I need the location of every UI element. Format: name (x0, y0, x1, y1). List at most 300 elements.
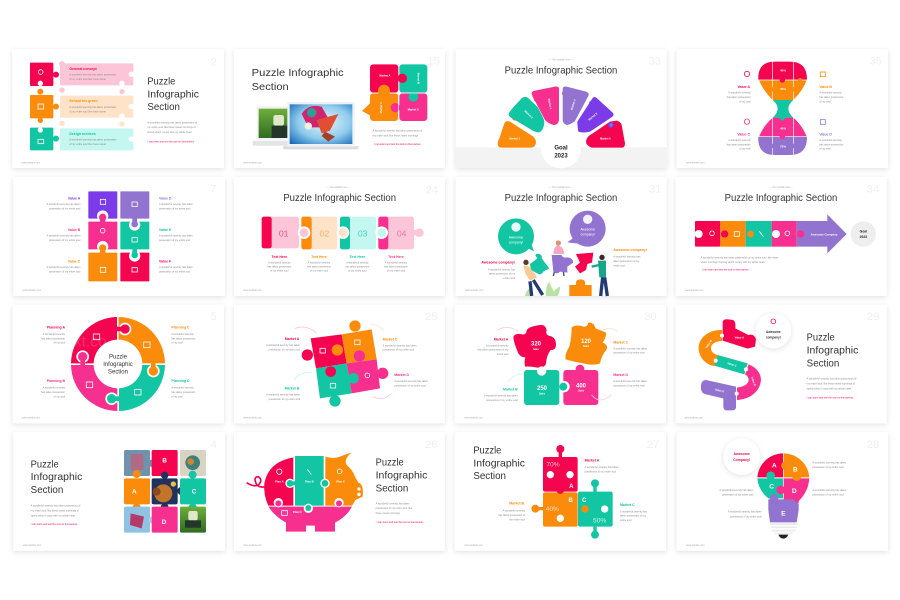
heading: Infographic (376, 470, 427, 481)
body text: my entire soul, like these sweet mornings of (147, 126, 196, 129)
value labels: possession of my entire soul (49, 239, 81, 242)
body text (373, 130, 423, 146)
row: design services: A wonderful serenity has taken possession (69, 139, 117, 142)
market labels: A wonderful serenity has taken (484, 395, 518, 398)
dollar sign puzzle: Value C (727, 361, 737, 368)
puzzle pieces: B (569, 498, 574, 504)
market labels: A wonderful serenity has (620, 510, 648, 513)
market labels (478, 337, 648, 402)
teal speech bubble: Awesome (509, 235, 523, 239)
small laptop image (253, 106, 295, 146)
body text: possession of my entire soul, like (376, 507, 413, 510)
bottom-left quadrant of slides (13, 305, 445, 551)
ring centre heading: Puzzle (109, 355, 128, 361)
market labels: possession of my entire soul (269, 398, 300, 401)
goal circle: Goal (554, 145, 568, 151)
rotated puzzle (302, 320, 388, 407)
callout circle: Awesome (734, 452, 750, 456)
body text (807, 378, 857, 399)
body text: A wonderful serenity has taken possession of (807, 378, 857, 381)
callout circle (723, 438, 760, 475)
right caption: Awesome company! (613, 248, 647, 252)
purple speech bubble (567, 211, 606, 247)
value labels and icons: Value C (737, 132, 750, 136)
body text: I can learn and test the tool on themselves (147, 140, 195, 143)
heading (31, 459, 82, 496)
step captions: Text Here (311, 255, 327, 259)
step 03: 03 (358, 229, 368, 239)
row: design services: of my entire soul like these sweet (69, 143, 106, 146)
callout circle (756, 313, 791, 348)
piggy bank puzzle: Plan D (293, 510, 302, 514)
value labels: Value F (159, 259, 171, 263)
planning labels: has taken possession (41, 337, 66, 340)
slide: rotated four-piece puzzle, number 25: www.website.com (243, 416, 262, 419)
arrow made of puzzle pieces: Awesome Company (811, 232, 838, 236)
slide: dollar sign, number 29: www.website.com (684, 416, 703, 419)
planning labels: A wonderful serenity (171, 333, 194, 336)
body text (701, 256, 779, 271)
heading: Section (376, 483, 409, 494)
slide: circular ring, number 5: 5 (211, 311, 217, 323)
heading (807, 333, 858, 369)
market labels (498, 459, 648, 522)
puzzle: four markets (362, 64, 427, 121)
heading: Puzzle (376, 458, 404, 469)
3 by 3 photo puzzle: C (192, 489, 197, 496)
value labels and icons: of my soul (819, 148, 831, 151)
row: general concept: of my entire soul like these sweet (69, 78, 106, 81)
slide: piggy bank, number 26: 26 (425, 439, 438, 451)
arrow made of puzzle pieces (695, 214, 847, 253)
ring centre heading: Infographic (103, 362, 133, 368)
3 by 3 photo puzzle: D (162, 519, 167, 526)
teal speech bubble (498, 218, 534, 254)
callout circle: Company! (733, 458, 750, 462)
left caption: A wonderful serenity has (488, 268, 516, 271)
market labels: Market D (613, 373, 629, 377)
semicircle of five puzzle segments: Market 1 (509, 136, 521, 140)
value labels: possession of my entire soul (49, 270, 81, 273)
heading: — Your subtitle here — (549, 58, 574, 61)
heading: Infographic (807, 345, 858, 356)
illustration: people holding puzzle pieces (523, 240, 607, 296)
body text (147, 121, 197, 143)
market labels: Market C (613, 340, 629, 344)
heading (283, 186, 396, 204)
market labels: A wonderful serenity has taken (266, 344, 301, 347)
right caption: A wonderful serenity has (613, 256, 641, 259)
left caption: taken possession of my (489, 273, 516, 276)
slide: light bulb, number 28 (677, 432, 888, 551)
slide: four numbered steps, number 24 (234, 177, 445, 296)
market labels: Market B (285, 386, 300, 390)
market labels: Market C (620, 503, 635, 507)
puzzle sales blobs: Sales (583, 346, 590, 348)
bulb labels: A wonderful serenity has taken (728, 511, 762, 514)
slide: puzzle with laptops, number 15 (234, 49, 445, 168)
heading (147, 77, 199, 113)
top-right quadrant of slides (456, 49, 888, 296)
slide: hourglass, number 35 (677, 49, 888, 168)
market labels: possession of my entire soul (383, 349, 414, 352)
market labels: Market D (394, 373, 410, 377)
slide: photo puzzle grid, number 4: 4 (211, 439, 217, 451)
puzzle: four markets: Market A (379, 74, 391, 78)
slide: six value squares, number 7: 7 (210, 184, 216, 196)
light bulb puzzle: D (792, 488, 797, 495)
row: general concept (30, 61, 134, 86)
slide: circular ring, number 5 (13, 305, 224, 423)
market labels: has taken possession of my (478, 349, 509, 352)
market labels: possession of my entire soul (486, 399, 518, 402)
piggy bank puzzle (247, 453, 363, 532)
3 by 3 photo puzzle: A (132, 489, 137, 496)
planning labels: of my soul (54, 342, 65, 345)
step 02 (298, 217, 337, 249)
heading: Section (147, 102, 180, 113)
market labels: Market B (509, 502, 524, 506)
heading (376, 458, 427, 494)
heading: Puzzle (147, 77, 176, 88)
heading: Section (31, 485, 64, 496)
value labels and icons: of my soul (819, 100, 831, 103)
heading: Section (807, 358, 840, 369)
puzzle pieces: 50% (593, 517, 606, 524)
body text: I can learn and test the tool on themselves (702, 268, 749, 271)
light bulb puzzle (757, 453, 809, 539)
planning labels: has taken possession (41, 391, 66, 394)
body text: my entire soul, like these sweet mornings of (807, 383, 855, 386)
step captions: has taken possession (384, 265, 409, 268)
step captions: has taken possession (267, 265, 292, 268)
heading: Puzzle Infographic Section (505, 65, 618, 76)
market labels: Market B (503, 388, 518, 392)
value labels: Value C (68, 259, 81, 263)
heading: Puzzle Infographic (252, 68, 344, 79)
step 04 (375, 217, 424, 249)
market labels: A wonderful serenity (486, 344, 509, 347)
value labels: Value E (159, 228, 172, 232)
step 02: 02 (320, 229, 329, 239)
body text (376, 502, 424, 524)
right caption: entire soul (613, 264, 625, 267)
slide: piggy bank, number 26 (234, 432, 445, 551)
slide: percentage puzzle, number 27: www.website.com (464, 544, 483, 547)
body text: sweet morning of spring which I enjoy with my whole heart. (701, 261, 766, 264)
semicircle of five puzzle segments: Market 3 (547, 98, 553, 110)
planning labels: A wonderful serenity (171, 387, 194, 390)
ring centre heading (103, 355, 133, 376)
slide: percentage puzzle, number 27 (455, 432, 666, 551)
ring of four puzzle pieces: xt.co (74, 334, 106, 351)
top-left quadrant of slides (12, 49, 445, 296)
bulb labels: possession of my entire soul (812, 494, 844, 497)
purple speech bubble: company! (580, 233, 595, 237)
heading: — Your subtitle here — (326, 186, 351, 189)
row: school the green: School the green (69, 99, 98, 103)
right caption (613, 248, 647, 267)
planning labels (41, 325, 196, 398)
bulb labels (719, 461, 847, 518)
value labels: A wonderful serenity has taken (159, 266, 193, 269)
light bulb puzzle: B (793, 467, 798, 474)
left caption (481, 260, 516, 280)
value labels: possession of my entire soul (159, 207, 191, 210)
value labels and icons: A wonderful serenity (819, 92, 842, 95)
puzzle: four markets: Market D (408, 108, 419, 112)
slide: people with puzzle, number 31: 31 (649, 184, 662, 196)
value labels: possession of my entire soul (159, 270, 191, 273)
puzzle sales blobs: 120 (581, 339, 592, 345)
step captions: Text Here (350, 255, 365, 259)
3 by 3 photo puzzle (124, 450, 206, 533)
step captions: A wonderful serenity (308, 261, 331, 264)
slide: people with puzzle, number 31: www.website.com (465, 289, 484, 292)
step captions: A wonderful serenity (268, 261, 291, 264)
bulb labels: possession of my entire soul (812, 466, 844, 469)
pig tail (247, 477, 266, 487)
step 03 (337, 217, 376, 249)
heading: Section (473, 471, 506, 482)
market labels: Market A (285, 337, 300, 341)
puzzle pieces: 40% (546, 506, 559, 513)
puzzle sales blobs: 250 (537, 386, 548, 392)
market labels: A wonderful serenity has taken (394, 380, 429, 383)
slide: hourglass, number 35: www.website.com (686, 161, 705, 164)
heading (473, 446, 525, 482)
heading: Infographic (473, 458, 525, 469)
heading: Section (252, 82, 289, 93)
bulb labels: A wonderful serenity has taken (812, 489, 847, 492)
body text: spring which I enjoy with my whole heart. (807, 387, 852, 390)
planning labels: has taken possession (171, 391, 196, 394)
market labels: A wonderful serenity has taken (383, 344, 417, 347)
slide: piggy bank, number 26: www.website.com (243, 544, 262, 547)
slide: photo puzzle grid, number 4 (13, 432, 225, 551)
row: general concept: A wonderful serenity has taken possession (69, 74, 117, 77)
value labels: A wonderful serenity has taken (46, 235, 81, 238)
curved arrows (294, 324, 391, 399)
body text: I can learn and test the tool on themselves (807, 396, 854, 399)
callout circle: company! (766, 336, 781, 340)
bulb labels: possession of my entire soul (730, 515, 762, 518)
slide: circular ring, number 5: www.website.com (22, 416, 40, 419)
market labels: possession of my entire soul (394, 384, 426, 387)
value labels: Value D (159, 196, 172, 200)
slide: six value squares, number 7: www.website.com (23, 289, 41, 292)
curved arrows (497, 327, 618, 400)
bulb labels: A wonderful serenity has taken (812, 461, 847, 464)
market labels: A wonderful serenity has taken (266, 394, 301, 397)
left caption: Awesome company! (481, 260, 515, 264)
heading: Puzzle Infographic Section (725, 193, 838, 204)
puzzle pieces (531, 445, 613, 539)
slide: puzzle rows, number 2: 2 (211, 56, 217, 68)
hourglass puzzle (758, 62, 807, 155)
slide: rotated four-piece puzzle, number 25: 25 (425, 311, 438, 323)
light bulb puzzle: E (781, 510, 786, 517)
heading: Infographic (31, 472, 82, 483)
market labels: has taken possession of (498, 514, 525, 517)
market labels: A wonderful serenity has taken (613, 347, 648, 350)
value labels: possession of my entire soul (159, 239, 191, 242)
planning labels: of my soul (171, 395, 183, 398)
goal circle: Goal (860, 230, 867, 234)
body text: these sweet mornings (376, 512, 401, 515)
value labels and icons: Value A (738, 85, 750, 89)
heading: Puzzle (807, 333, 835, 344)
puzzle sales blobs: Sales (578, 391, 585, 393)
value labels and icons: A wonderful serenity (819, 139, 842, 142)
bottom-right quadrant of slides (455, 305, 888, 551)
large laptop image (283, 102, 358, 149)
hourglass puzzle: 45% (780, 87, 786, 91)
right caption: taken possession of my (613, 260, 640, 263)
hourglass puzzle: 40% (780, 126, 786, 130)
heading (505, 58, 618, 76)
step captions: Text Here (388, 255, 404, 259)
planning labels: A wonderful serenity (43, 333, 66, 336)
value labels: A wonderful serenity has taken (159, 235, 193, 238)
slide: semicircle goal, number 33 (456, 49, 667, 168)
step captions: has taken possession (345, 265, 370, 268)
value labels: A wonderful serenity has taken (46, 266, 81, 269)
slide: puzzle rows, number 2: www.website.com (22, 161, 40, 164)
value labels and icons: has taken possession (819, 143, 844, 146)
body text: A wonderful serenity has taken (376, 502, 410, 505)
body text: spring which I enjoy with my whole heart. (147, 131, 193, 134)
value labels and icons: A wonderful serenity (728, 139, 751, 142)
slide: photo puzzle grid, number 4: www.website.com (23, 544, 41, 547)
heading: Infographic (147, 89, 199, 100)
step captions: A wonderful serenity (385, 261, 408, 264)
hourglass puzzle: 45% (780, 68, 786, 72)
step captions (267, 255, 409, 273)
value labels and icons: Value B (819, 85, 832, 89)
slide: light bulb, number 28: 28 (867, 439, 879, 451)
heading (725, 186, 838, 204)
slide: percentage puzzle, number 27: 27 (647, 439, 659, 451)
planning labels: Planning B (47, 379, 65, 383)
slide: light bulb, number 28: www.website.com (686, 544, 705, 547)
planning labels: Planning A (47, 325, 65, 329)
slide: four numbered steps, number 24: 24 (426, 184, 438, 196)
3 by 3 photo puzzle: B (162, 458, 167, 465)
slide: hourglass, number 35: 35 (869, 56, 882, 68)
heading: — Your subtitle here — (769, 186, 794, 189)
slide: puzzle arrow, number 34 (676, 177, 887, 296)
body text: A wonderful serenity has taken possession of my entire soul, like these (701, 256, 779, 259)
row: general concept: General concept (69, 67, 97, 71)
slide: four sales blobs, number 30 (455, 305, 666, 423)
semicircle of five puzzle segments: Market 2 (523, 109, 534, 120)
planning labels: A wonderful serenity (43, 387, 66, 390)
light bulb puzzle: C (769, 484, 774, 491)
heading: Puzzle Infographic Section (505, 193, 618, 204)
row: school the green: of my entire soul like these sweet (69, 110, 106, 113)
value labels: Value B (68, 228, 81, 232)
semicircle of five puzzle segments: Market 4 (569, 98, 577, 110)
market labels: entire soul (620, 519, 632, 522)
puzzle sales blobs: Sales (533, 349, 540, 351)
slide: puzzle arrow, number 34: 34 (867, 184, 879, 196)
slide: four sales blobs, number 30: 30 (644, 311, 657, 323)
piggy bank puzzle: Plan A (275, 479, 284, 483)
slide: semicircle goal, number 33: 33 (648, 56, 661, 68)
value labels: A wonderful serenity has taken (159, 203, 193, 206)
slide: puzzle with laptops, number 15: 15 (427, 56, 440, 68)
planning labels: Planning D (171, 379, 190, 383)
left caption: entire soul (504, 277, 515, 280)
light bulb puzzle: A (772, 463, 777, 470)
value labels and icons: of my soul (739, 148, 751, 151)
heading: — Your subtitle here — (549, 186, 574, 189)
value labels and icons: of my soul (739, 100, 751, 103)
slide: six value squares, number 7 (13, 177, 225, 296)
value labels and icons: A wonderful serenity (728, 92, 751, 95)
heading (252, 68, 344, 93)
dollar sign puzzle: Value A (735, 336, 744, 340)
semicircle of five puzzle segments (498, 87, 625, 148)
step captions: Text Here (272, 255, 287, 259)
value labels and icons: has taken possession (819, 96, 844, 99)
market labels (266, 337, 429, 401)
slide: puzzle arrow, number 34: www.website.com (685, 289, 704, 292)
row: design services (30, 121, 134, 150)
body text (31, 505, 81, 526)
step 01: 01 (279, 229, 289, 239)
purple speech bubble: Awesome (580, 227, 595, 231)
slide: dollar sign, number 29 (676, 305, 887, 423)
row: school the green (30, 87, 134, 123)
market labels: Market A (585, 459, 600, 463)
step 01 (262, 217, 299, 248)
planning labels: has taken possession (171, 337, 196, 340)
slide: puzzle rows, number 2 (12, 49, 224, 168)
value labels (46, 196, 193, 273)
market labels: A wonderful serenity (503, 510, 526, 513)
puzzle sales blobs (513, 323, 607, 405)
body text: I can learn and test the tool on themselves (377, 521, 424, 524)
value labels: possession of my entire soul (49, 207, 81, 210)
puzzle sales blobs: Sales (539, 393, 546, 395)
body text: A wonderful serenity has taken possession of (373, 130, 423, 133)
row: school the green: A wonderful serenity has taken possession (69, 106, 117, 109)
semicircle of five puzzle segments: Market 5 (587, 111, 599, 122)
slide: rotated four-piece puzzle, number 25 (234, 305, 445, 423)
slide: puzzle with laptops, number 15: www.website.com (243, 161, 262, 164)
market labels: taken possession of my (620, 515, 647, 518)
heading (505, 186, 618, 204)
market labels: the entire soul (509, 518, 525, 521)
market labels: A wonderful serenity has taken (585, 466, 619, 469)
hourglass puzzle: 75% (780, 144, 786, 148)
body text: A wonderful serenity has taken possession of (31, 505, 81, 508)
body text: A wonderful serenity has taken possession of (147, 121, 197, 124)
value labels: A wonderful serenity has taken (46, 203, 81, 206)
market labels: Market A (494, 337, 509, 341)
body text: my entire soul, like these sweet mornings (373, 134, 419, 137)
bulb labels: A wonderful serenity has taken (719, 489, 754, 492)
market labels: A wonderful serenity has taken (613, 380, 648, 383)
goal circle (851, 221, 876, 247)
slide: people with puzzle, number 31 (456, 177, 667, 296)
step captions: of my entire soul (310, 270, 329, 273)
step captions: of my entire soul (387, 270, 406, 273)
dollar sign puzzle: Value D (750, 376, 757, 387)
row: design services: Design services (69, 132, 96, 136)
